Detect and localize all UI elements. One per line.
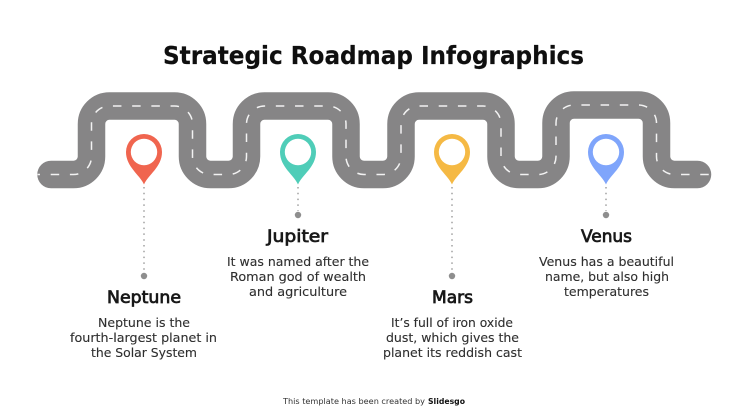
connector: Venus — [603, 187, 609, 218]
footer credit: Slidesgo — [428, 397, 465, 406]
connector: Jupiter — [295, 187, 301, 218]
text block: Jupiter: and agriculture — [249, 285, 347, 299]
text block: Neptune: the Solar System — [91, 346, 197, 360]
text block: Venus: name, but also high — [545, 270, 669, 284]
text block: Jupiter: It was named after the — [227, 255, 369, 269]
pin: red — [126, 134, 162, 184]
connector: Mars — [449, 187, 455, 279]
text block: Venus: temperatures — [564, 285, 649, 299]
pin: teal — [280, 134, 316, 184]
text block: Mars: planet its reddish cast — [383, 346, 522, 360]
text block: Mars: dust, which gives the — [386, 331, 519, 345]
text block: Neptune: fourth-largest planet in — [70, 331, 217, 345]
pin: yellow — [434, 134, 470, 184]
text block: Venus — [539, 227, 674, 299]
text block: Mars: Mars — [432, 288, 473, 307]
text block: Jupiter: Roman god of wealth — [230, 270, 366, 284]
text block: Mars: It’s full of iron oxide — [391, 316, 513, 330]
title: Strategic Roadmap Infographics — [163, 41, 584, 70]
text block: Neptune — [70, 288, 217, 360]
text block: Neptune: Neptune — [107, 288, 181, 307]
text block: Venus: Venus — [581, 227, 632, 246]
text block: Jupiter — [227, 227, 369, 299]
footer credit: This template has been created by — [282, 397, 425, 406]
text block: Venus: Venus has a beautiful — [539, 255, 674, 269]
text block: Neptune: Neptune is the — [98, 316, 190, 330]
pin: blue — [588, 134, 624, 184]
text block: Jupiter: Jupiter — [266, 227, 328, 246]
winding road — [38, 105, 711, 174]
text block: Mars — [383, 288, 522, 360]
connector: Neptune — [141, 187, 147, 279]
